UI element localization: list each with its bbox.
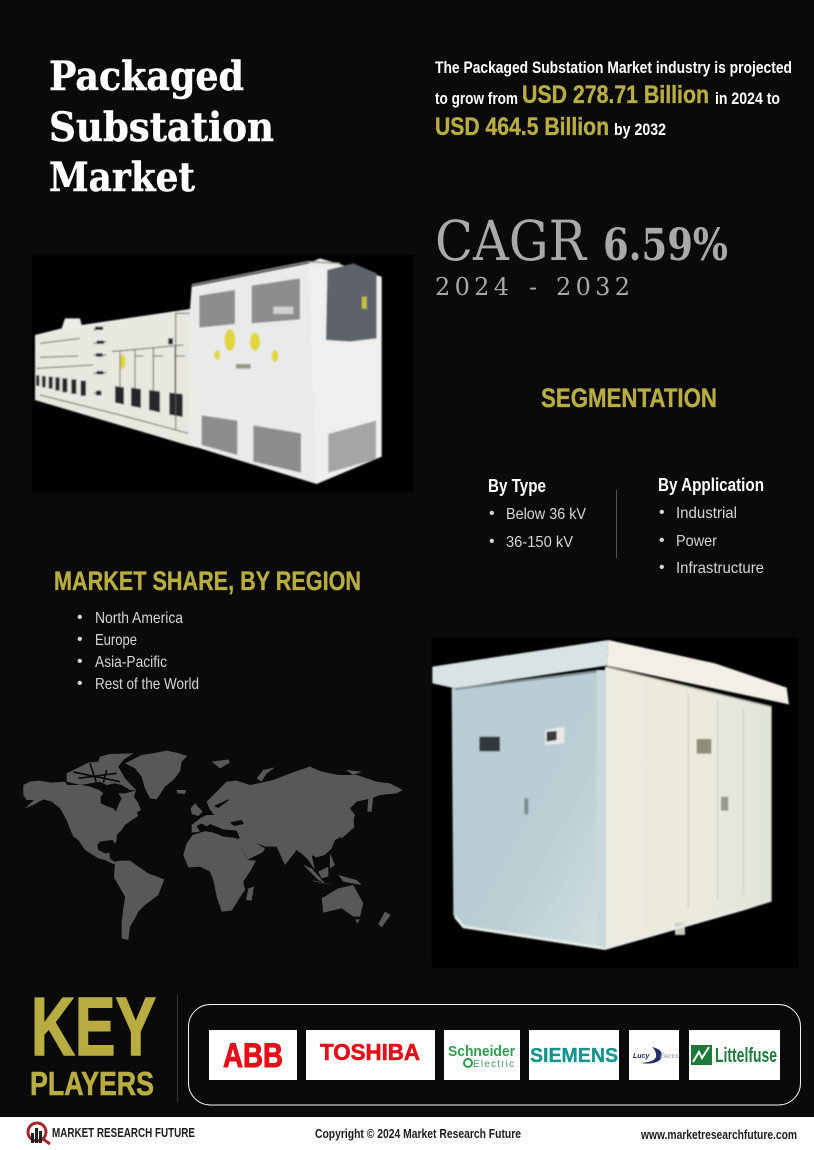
region list: Rest of the World xyxy=(95,676,199,693)
world map xyxy=(23,751,403,940)
CAGR callout: CAGR xyxy=(435,209,587,273)
market share heading: MARKET SHARE, BY REGION xyxy=(54,566,361,596)
CAGR callout: 2032 xyxy=(556,273,630,301)
segment list: by application: Industrial xyxy=(676,505,737,522)
logo: Littelfuse xyxy=(689,1030,780,1080)
segment list: by type: Below 36 kV xyxy=(506,506,586,523)
region list: Europe xyxy=(95,632,137,649)
market growth summary text: USD 278.71 Billion xyxy=(522,81,709,109)
segment list: by application: Power xyxy=(676,533,718,550)
logo: Siemens: SIEMENS xyxy=(530,1045,618,1067)
region list: • xyxy=(77,631,83,648)
logo: Siemens xyxy=(529,1030,619,1080)
copyright: Copyright © 2024 Market Research Future xyxy=(315,1127,521,1141)
logo: Lucy Electric: Lucy xyxy=(633,1053,650,1060)
segment list: by application: Infrastructure xyxy=(676,560,764,577)
key players panel xyxy=(188,1004,800,1105)
region list: • xyxy=(77,609,83,626)
image: compact substation enclosure xyxy=(432,638,798,968)
segment list: by application: By Application xyxy=(658,475,764,495)
logo: Lucy Electric xyxy=(629,1030,680,1080)
segment list: by type xyxy=(488,476,586,551)
region list: • xyxy=(77,653,83,670)
roof right xyxy=(607,640,789,704)
ventilation grilles xyxy=(199,278,376,473)
segment list: by type: 36-150 kV xyxy=(506,534,573,551)
footer bar xyxy=(0,1117,814,1150)
name plates xyxy=(479,737,500,751)
logo: Schneider Electric xyxy=(444,1030,520,1080)
breaker meters xyxy=(36,375,183,417)
region list: • xyxy=(77,675,83,692)
market growth summary text: to grow from xyxy=(435,89,518,108)
CAGR callout xyxy=(435,209,728,301)
market growth summary text: in 2024 to xyxy=(715,89,780,108)
logo: Littelfuse: Littelfuse xyxy=(715,1045,777,1067)
segment list: by type: • xyxy=(489,533,495,550)
logo: ABB: ABB xyxy=(223,1037,283,1075)
market growth summary text xyxy=(435,58,792,141)
left wall xyxy=(452,670,605,950)
right wall xyxy=(605,667,772,950)
CAGR callout: 6.59% xyxy=(603,220,728,271)
segment list: by application: • xyxy=(659,504,665,521)
grey junction box xyxy=(326,263,377,342)
door handles xyxy=(524,798,528,814)
segment list: by type: By Type xyxy=(488,476,546,496)
logo: Lucy Electric: Electric xyxy=(660,1054,680,1060)
logo: Toshiba xyxy=(306,1030,435,1080)
region list xyxy=(77,609,199,693)
title xyxy=(49,53,274,201)
logo: ABB xyxy=(209,1030,297,1080)
segment list: by application: • xyxy=(659,532,665,549)
image: long packaged substation xyxy=(32,255,413,492)
key players heading: KEY xyxy=(31,980,156,1073)
segment list: by type: • xyxy=(489,505,495,522)
segment list: by application: • xyxy=(659,559,665,576)
segment list: by application xyxy=(658,475,764,577)
market growth summary text: by 2032 xyxy=(614,120,666,139)
door seams xyxy=(688,693,743,908)
region list: North America xyxy=(95,610,183,627)
roof left xyxy=(432,640,608,688)
region list: Asia-Pacific xyxy=(95,654,167,671)
company name: MARKET RESEARCH FUTURE xyxy=(52,1126,195,1140)
title: Market xyxy=(49,154,195,201)
key players heading: PLAYERS xyxy=(30,1065,154,1102)
mimic diagram lines xyxy=(37,313,190,433)
logo: Schneider Electric: Schneider xyxy=(448,1043,515,1060)
key players heading xyxy=(30,980,156,1102)
title: Substation xyxy=(49,104,274,151)
warning stickers xyxy=(120,329,278,369)
CAGR callout: 2024 xyxy=(435,273,509,301)
segmentation heading: SEGMENTATION xyxy=(541,383,717,413)
market growth summary text: USD 464.5 Billion xyxy=(435,113,609,141)
CAGR callout: - xyxy=(529,273,537,301)
icon: market research future logo xyxy=(28,1123,50,1144)
logo: Toshiba: TOSHIBA xyxy=(320,1039,420,1065)
title: Packaged xyxy=(49,53,244,100)
logo: Schneider Electric: Electric xyxy=(473,1059,514,1070)
